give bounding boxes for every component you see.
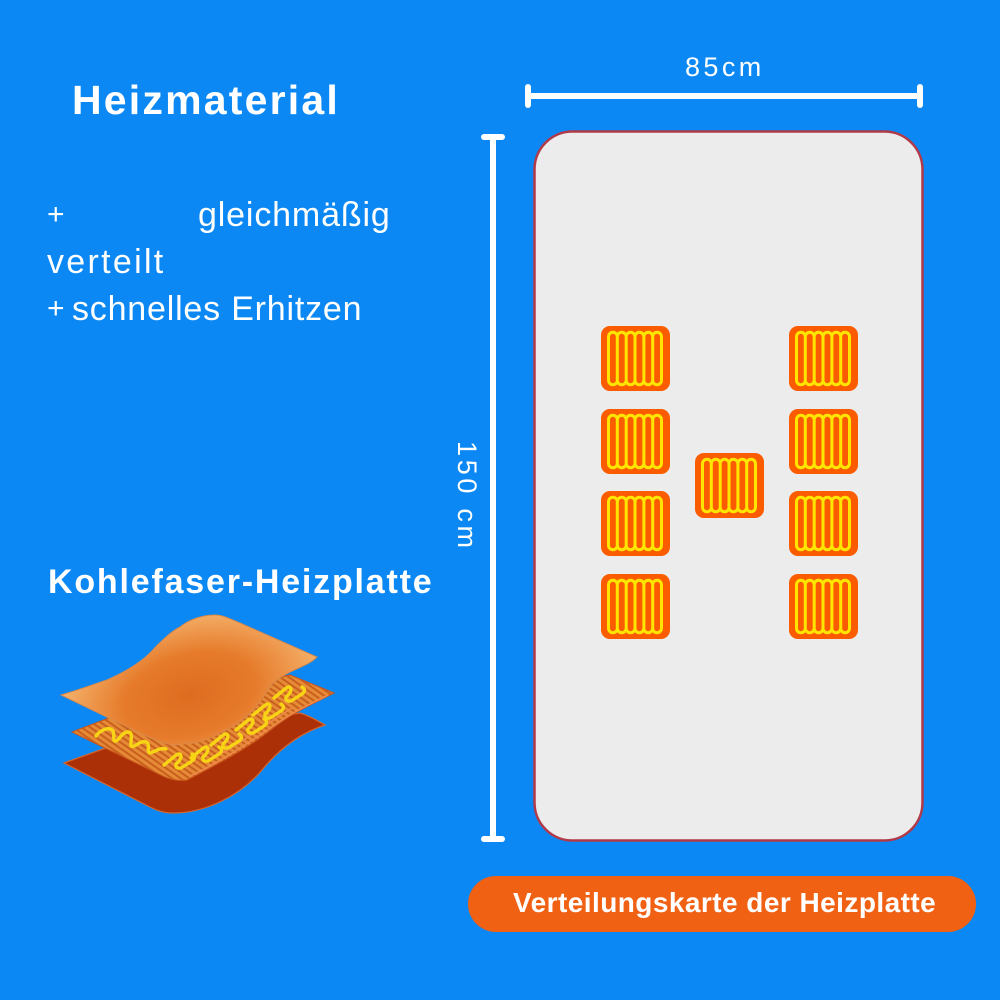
text block: benefits: schnelles Erhitzen [72,290,362,328]
middle layer [72,675,334,780]
heating pad: left column 2 [601,409,670,474]
width label: 85cm [685,52,765,82]
heading: carbon fibre heating plate: Kohlefaser-Heizplatte [48,563,433,601]
heating pad: right column 1 [789,326,858,391]
title: Heizmaterial [72,77,340,123]
text block: benefits [47,196,391,328]
heating pad: centre [695,453,764,518]
text block: benefits: + [47,198,65,231]
height dimension arrow [481,134,505,842]
middle layer edge streaks [190,695,328,776]
bottom layer [64,713,325,813]
heating pad: right column 3 [789,491,858,556]
heating mat panel [534,132,922,840]
top sheet [61,615,317,745]
heating pad: left column 1 [601,326,670,391]
caption: heating plate distribution map: Verteilungskarte der Heizplatte [513,887,936,918]
height label: 150 cm [452,441,482,552]
heating pad: left column 3 [601,491,670,556]
text block: benefits: + [47,292,65,325]
heating pad: left column 4 [601,574,670,639]
icon: layered carbon fibre plate [61,615,334,813]
heating pad: right column 2 [789,409,858,474]
caption button background [468,876,976,932]
text block: benefits: gleichmäßig [198,196,391,234]
text block: benefits: verteilt [47,243,166,281]
width dimension arrow [525,84,923,108]
heating pad: right column 4 [789,574,858,639]
heating wire [96,687,304,768]
